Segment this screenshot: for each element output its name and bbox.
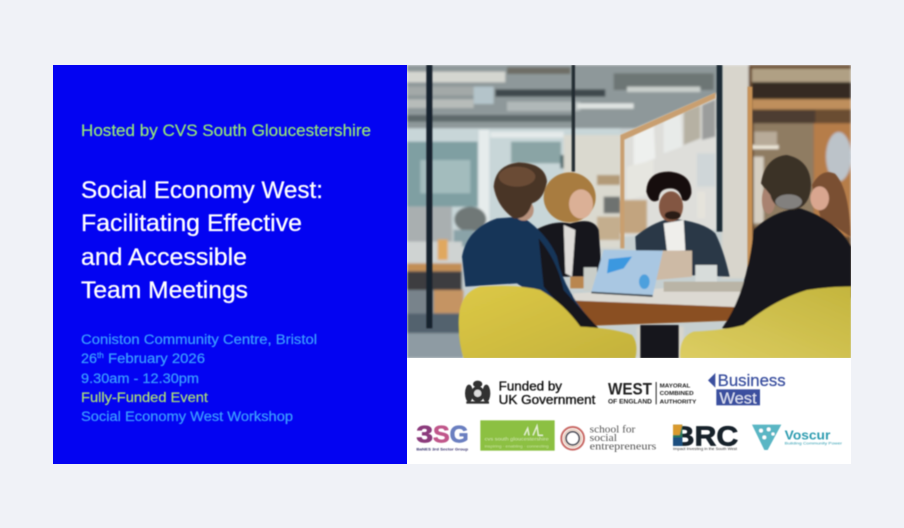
logo: Funded by UK Government: UK Government — [499, 392, 596, 407]
yellow chair left — [459, 286, 636, 358]
logo: Voscur — [752, 425, 843, 450]
logo: BRC: Impact Investing in the South West — [673, 447, 737, 451]
wooden room on the right — [749, 65, 851, 298]
glass wall frames — [426, 65, 432, 328]
logo: CVS South Gloucestershire: inspiring · enabling · connecting — [485, 443, 549, 448]
ceiling with ducts — [407, 65, 720, 128]
event information: th — [97, 351, 104, 360]
logo: Business West: Business — [718, 371, 786, 390]
logo: School for Social Entrepreneurs: social — [590, 433, 617, 444]
second laptop — [655, 251, 692, 280]
logo: School for Social Entrepreneurs: school for — [590, 425, 636, 436]
woman with curly hair — [544, 172, 596, 222]
logo: 3SG: BaNES 3rd Sector Group — [416, 447, 469, 451]
pillar — [722, 65, 749, 278]
title: Facilitating Effective — [81, 210, 302, 237]
man in centre — [635, 218, 730, 277]
desks on the left — [407, 207, 452, 242]
event information: 9.30am - 12.30pm — [81, 371, 199, 386]
title: Team Meetings — [81, 277, 248, 304]
glasses and papers — [584, 267, 597, 291]
title: and Accessible — [81, 244, 247, 271]
icon: royal coat of arms — [465, 381, 490, 404]
logo: Funded by UK Government: Funded by — [499, 379, 563, 394]
man from behind, left — [461, 216, 586, 315]
event information: 26 — [81, 351, 97, 366]
logo: West of England Mayoral Combined Authority: AUTHORITY — [660, 399, 697, 405]
logo: West of England Mayoral Combined Authority: COMBINED — [660, 391, 694, 397]
photo: team meeting around a table — [407, 65, 851, 358]
logo: 3SG: G — [450, 421, 469, 448]
logo: West of England Mayoral Combined Authority: OF ENGLAND — [608, 400, 653, 406]
logo: West of England Mayoral Combined Authority — [608, 380, 697, 406]
logo: 3SG: S — [433, 421, 450, 448]
logo: School for Social Entrepreneurs: entrepreneurs — [590, 441, 656, 452]
logo: School for Social Entrepreneurs — [561, 425, 656, 452]
logo: 3SG — [416, 421, 469, 451]
title: Social Economy West: — [81, 177, 323, 204]
laptop — [591, 250, 663, 296]
woman far right — [812, 172, 850, 237]
logo: Voscur: Voscur — [785, 427, 830, 442]
logo: BRC: BRC — [673, 420, 738, 451]
table — [572, 288, 742, 308]
logo: West of England Mayoral Combined Authority: MAYORAL — [660, 383, 691, 389]
event information: Social Economy West Workshop — [81, 409, 293, 424]
yellow chair right — [680, 287, 851, 358]
bookcase wall — [620, 93, 717, 237]
event information: February 2026 — [108, 351, 205, 366]
host line: Hosted by CVS South Gloucestershire — [81, 122, 371, 140]
event information: Fully-Funded Event — [81, 390, 208, 405]
man from behind, right — [722, 208, 851, 330]
logo: Business West: West — [719, 390, 757, 407]
logo: Funded by UK Government — [499, 379, 596, 407]
left glass room — [407, 128, 620, 228]
logo: CVS South Gloucestershire: cvs south gloucestershire — [485, 436, 549, 442]
title — [81, 177, 323, 304]
logo: Business West — [708, 371, 786, 407]
event information — [81, 332, 317, 424]
logo: Voscur: Building Community Power — [785, 442, 843, 446]
panel: event details — [53, 65, 407, 464]
logo: 3SG: 3 — [416, 421, 433, 448]
pale shelving behind — [564, 135, 620, 248]
event information: Coniston Community Centre, Bristol — [81, 332, 317, 347]
panel: funder and partner logos — [407, 358, 851, 464]
logo: West of England Mayoral Combined Authority: WEST — [608, 380, 652, 399]
logo: CVS South Gloucestershire — [480, 420, 555, 451]
